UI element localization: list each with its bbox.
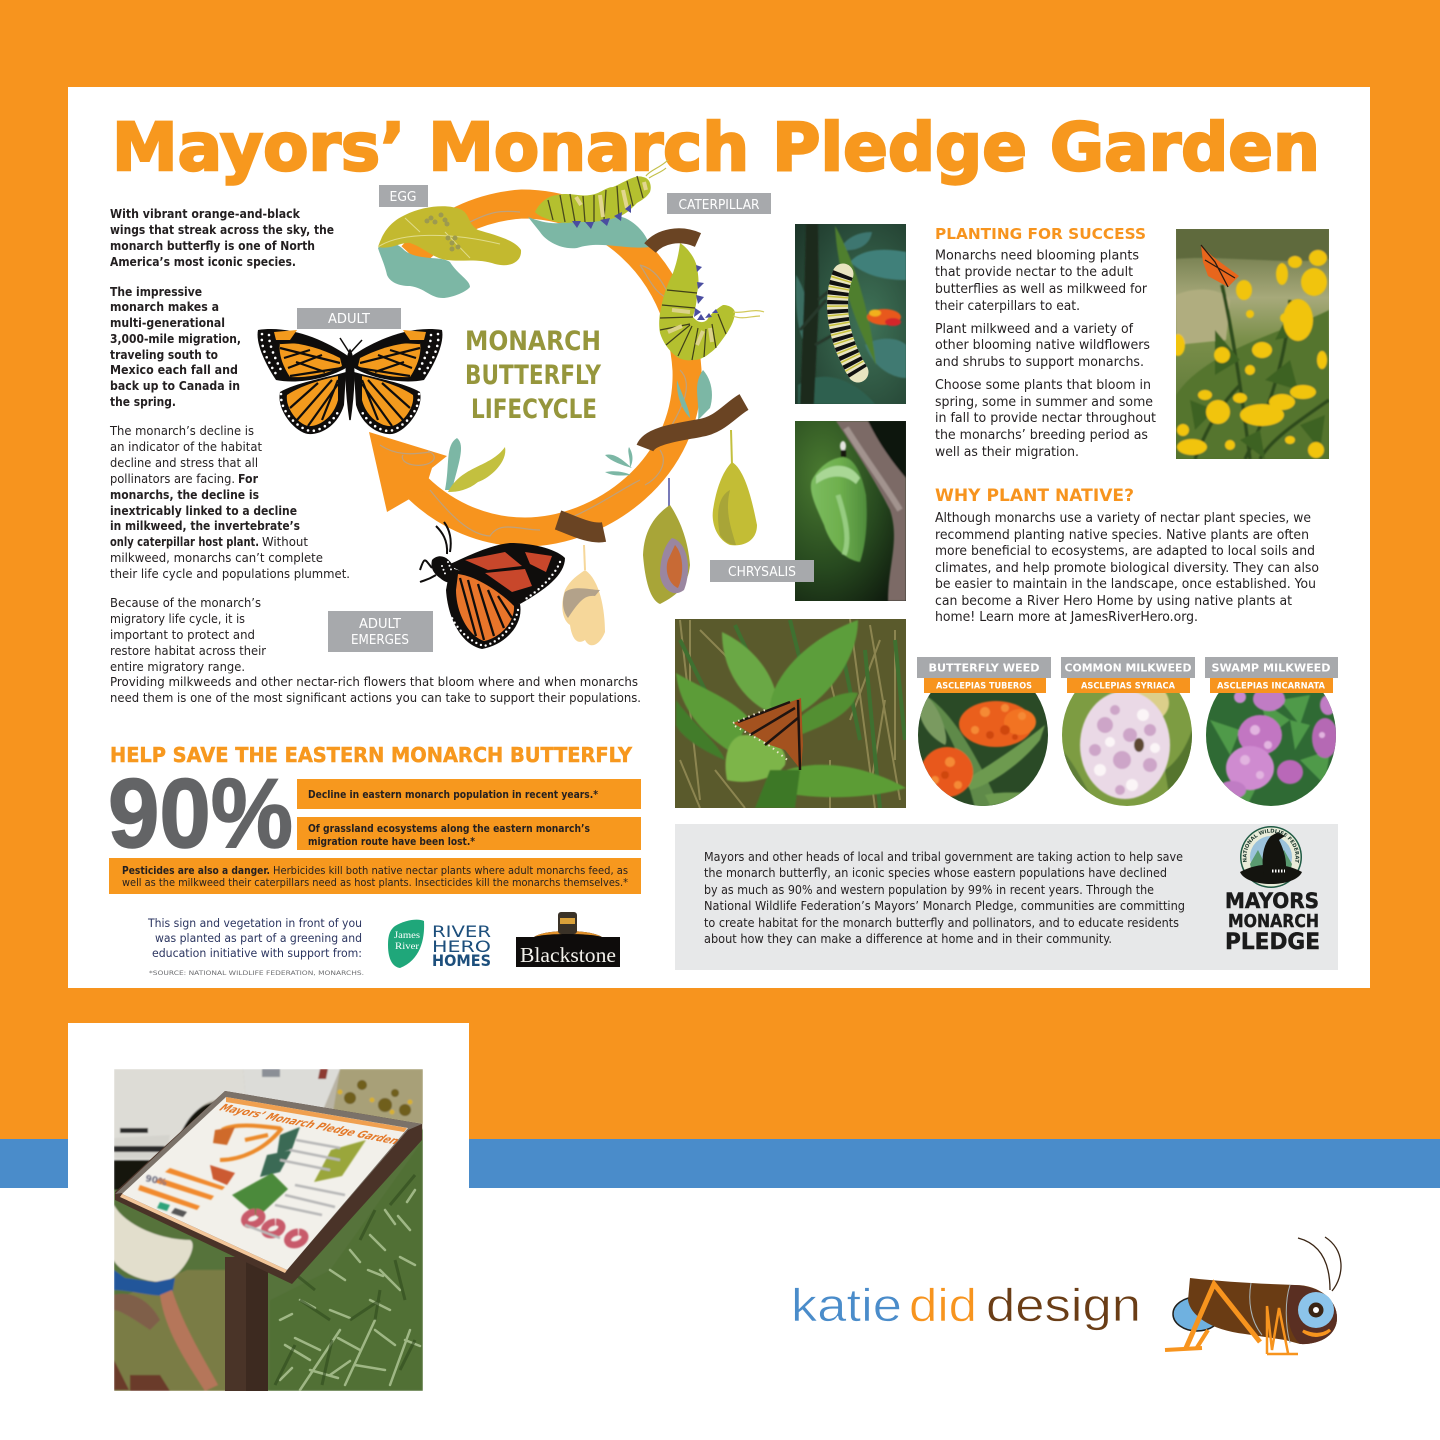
pledge body text: by as much as 90% and western population by 99% in recent years. Through the	[704, 883, 1154, 897]
plant card: common milkweed	[1060, 657, 1196, 810]
branch middle	[645, 402, 744, 448]
brand wordmark: katiedid design: did	[909, 1279, 977, 1331]
sign post	[246, 1262, 268, 1391]
bold migration paragraph: The impressive	[110, 285, 202, 299]
plant card: swamp milkweed	[1204, 657, 1340, 810]
support statement: education initiative with support from:	[152, 947, 362, 960]
bold intro paragraph: America’s most iconic species.	[110, 255, 296, 269]
stat bar: population decline: Decline in eastern monarch population in recent years.*	[308, 790, 599, 801]
bold migration paragraph	[110, 285, 241, 409]
section: planting for success: butterflies as well as milkweed for	[935, 282, 1148, 297]
logo: blackstone: Blackstone	[520, 943, 616, 967]
label: caterpillar	[667, 193, 771, 214]
pledge body text: about how they can make a difference at home and in their community.	[704, 932, 1112, 946]
section: planting for success: well as their migration.	[935, 445, 1079, 460]
branch top	[650, 236, 698, 248]
habitat paragraph: entire migratory range.	[110, 660, 245, 674]
decline paragraph: only caterpillar host plant.	[110, 535, 259, 549]
section: planting for success: PLANTING FOR SUCCESS	[935, 225, 1146, 243]
photo: green chrysalis	[795, 421, 906, 601]
bold migration paragraph: monarch makes a	[110, 300, 219, 314]
center heading: BUTTERFLY	[465, 360, 601, 391]
photo: yellow flowers	[1171, 229, 1329, 459]
plant card: common milkweed: ASCLEPIAS SYRIACA	[1081, 682, 1175, 692]
habitat paragraph: migratory life cycle, it is	[110, 612, 245, 626]
sign face	[120, 1097, 408, 1273]
section: planting for success: Plant milkweed and a variety of	[935, 322, 1133, 337]
brand wordmark: katiedid design	[791, 1279, 1141, 1331]
logo: river hero homes: RIVER	[432, 922, 491, 941]
support statement	[147, 917, 362, 960]
habitat paragraph: Because of the monarch’s	[110, 596, 261, 610]
intro text column	[109, 207, 641, 705]
photo: monarch on milkweed	[675, 619, 906, 808]
logo: river hero homes: HERO	[432, 937, 491, 956]
logo: mayors monarch pledge wordmark: PLEDGE	[1225, 930, 1320, 955]
stat bar: grassland lost	[297, 817, 641, 850]
decline paragraph	[109, 424, 350, 581]
section: planting for success: spring, some in summer and some	[935, 395, 1153, 410]
teal leaf on ring	[677, 370, 712, 420]
section: why plant native: home! Learn more at JamesRiverHero.org.	[935, 610, 1198, 625]
hanging caterpillar	[659, 243, 764, 360]
label: adult emerges: EMERGES	[351, 633, 409, 648]
section: why plant native: be easier to maintain in the landscape, once established. You	[935, 577, 1316, 592]
support statement: This sign and vegetation in front of you	[147, 917, 362, 930]
support statement: was planted as part of a greening and	[155, 932, 362, 945]
egg leaf with teal underside	[378, 206, 521, 298]
blue band	[0, 1139, 1440, 1188]
decline paragraph: For	[238, 472, 259, 486]
decline paragraph: The monarch’s decline is	[109, 424, 254, 438]
plant card: butterfly weed: BUTTERFLY WEED	[928, 662, 1040, 674]
stat bar: pesticides: Pesticides are also a danger.	[122, 866, 270, 877]
section: why plant native: recommend planting native species. Native plants are often	[935, 528, 1309, 543]
center heading	[465, 326, 601, 425]
section: planting for success	[935, 225, 1156, 460]
decline paragraph: Without	[262, 535, 308, 549]
logo: river hero homes: River	[395, 942, 420, 952]
section: planting for success: Monarchs need blooming plants	[935, 248, 1139, 264]
bold intro paragraph	[110, 207, 334, 269]
panel: mayors monarch pledge	[675, 824, 1338, 970]
brand wordmark: katiedid design: design	[986, 1279, 1141, 1331]
logo: national wildlife federation	[1240, 826, 1302, 888]
logo: national wildlife federation: NATIONAL WILDLIFE FEDERATION	[1242, 828, 1300, 864]
decline paragraph: decline and stress that all	[110, 456, 258, 470]
section: why plant native: WHY PLANT NATIVE?	[935, 486, 1134, 506]
label: adult	[297, 308, 401, 329]
decline paragraph: an indicator of the habitat	[110, 440, 262, 454]
caterpillar on leaf	[528, 160, 668, 248]
logo: mayors monarch pledge wordmark: MAYORS	[1225, 889, 1319, 914]
label: adult emerges	[328, 611, 433, 652]
plant card: swamp milkweed: ASCLEPIAS INCARNATA	[1217, 682, 1325, 692]
pledge body text	[704, 850, 1185, 946]
sign face: 90%	[144, 1174, 168, 1188]
decline paragraph: inextricably linked to a decline	[110, 504, 297, 518]
stat bar: grassland lost: migration route have been lost.*	[308, 837, 476, 848]
section: why plant native: climates, and help promote biological diversity. They can also	[935, 561, 1319, 576]
logo: river hero homes	[388, 920, 491, 970]
habitat paragraph: important to protect and	[110, 628, 255, 642]
white photo panel	[68, 1023, 469, 1440]
darkening chrysalis	[643, 478, 690, 604]
habitat paragraph	[110, 596, 641, 705]
icon: katydid mascot	[1165, 1237, 1341, 1354]
plant card: swamp milkweed: SWAMP MILKWEED	[1212, 662, 1330, 674]
section: planting for success: their caterpillars to eat.	[935, 299, 1080, 314]
pale empty chrysalis	[562, 545, 605, 645]
decline paragraph: in milkweed, the invertebrate’s	[110, 519, 300, 533]
bold migration paragraph: Mexico each fall and	[110, 363, 238, 377]
label: chrysalis: CHRYSALIS	[728, 565, 796, 580]
section: planting for success: the monarchs’ breeding period as	[935, 428, 1148, 443]
photo: caterpillar on milkweed	[795, 224, 906, 404]
plant card: butterfly weed: ASCLEPIAS TUBEROS	[936, 682, 1032, 692]
bold migration paragraph: the spring.	[110, 395, 176, 409]
small leaves inside ring	[445, 438, 632, 492]
pledge body text: to create habitat for the monarch butterfly and pollinators, and to educate residents	[704, 916, 1179, 930]
milkweed foliage strokes	[280, 1190, 420, 1390]
photo: installed sign	[114, 1069, 423, 1391]
bold migration paragraph: 3,000-mile migration,	[110, 332, 241, 346]
bold migration paragraph: traveling south to	[110, 348, 218, 362]
habitat paragraph: Providing milkweeds and other nectar-rich flowers that bloom where and when monarchs	[110, 675, 638, 689]
stat bar: pesticides: well as the milkweed their caterpillars need as host plants. Insecticides kill the monarchs themselves.*	[122, 878, 628, 889]
bold migration paragraph: back up to Canada in	[110, 379, 240, 393]
label: caterpillar: CATERPILLAR	[678, 198, 760, 213]
decline paragraph: pollinators are facing.	[110, 472, 235, 486]
center heading: MONARCH	[465, 326, 601, 357]
label: chrysalis	[710, 560, 814, 582]
section: planting for success: and shrubs to support monarchs.	[935, 355, 1144, 370]
section: why plant native	[935, 486, 1319, 625]
plant card: common milkweed: COMMON MILKWEED	[1064, 662, 1192, 674]
label: egg	[379, 185, 428, 207]
logo: mayors monarch pledge wordmark: MONARCH	[1228, 911, 1319, 932]
pledge body text: National Wildlife Federation’s Mayors’ Monarch Pledge, communities are committing	[704, 899, 1185, 913]
plant card: butterfly weed	[915, 657, 1051, 810]
photo background: grass and car	[114, 1069, 423, 1391]
pledge body text: the monarch butterfly, an iconic species whose eastern populations have declined	[704, 866, 1167, 880]
brand wordmark: katiedid design: katie	[791, 1279, 902, 1331]
pledge body text: Mayors and other heads of local and tribal government are taking action to help save	[704, 850, 1183, 864]
emerging butterfly	[420, 522, 565, 649]
section: planting for success: in fall to provide nectar throughout	[935, 411, 1156, 426]
section: planting for success: that provide nectar to the adult	[935, 265, 1133, 280]
big stat: 90%: 90%	[108, 758, 293, 868]
logo: mayors monarch pledge wordmark	[1225, 889, 1320, 955]
label: adult: ADULT	[328, 312, 370, 327]
logo: river hero homes: HOMES	[432, 951, 491, 970]
source note: *SOURCE: NATIONAL WILDLIFE FEDERATION, MONARCHS.	[149, 969, 364, 977]
bottom branch	[558, 520, 604, 533]
orange background band	[0, 0, 1440, 1139]
bold migration paragraph: multi-generational	[110, 316, 225, 330]
stat bar: population decline	[297, 779, 641, 809]
decline paragraph: monarchs, the decline is	[110, 488, 259, 502]
logo: blackstone	[516, 912, 620, 967]
label: adult emerges: ADULT	[359, 617, 401, 632]
logo: river hero homes: James	[394, 931, 420, 941]
bold intro paragraph: With vibrant orange-and-black	[110, 207, 301, 221]
lifecycle diagram	[258, 160, 814, 652]
stat bar: pesticides	[109, 858, 641, 894]
decline paragraph: milkweed, monarchs can’t complete	[110, 551, 323, 565]
lifecycle ring arrow	[369, 204, 687, 536]
center heading: LIFECYCLE	[471, 394, 597, 425]
stat bar: grassland lost: Of grassland ecosystems along the eastern monarch’s	[308, 824, 590, 835]
bold intro paragraph: wings that streak across the sky, the	[110, 223, 334, 237]
heading: help save the eastern monarch butterfly: HELP SAVE THE EASTERN MONARCH BUTTERFLY	[110, 743, 633, 767]
bold intro paragraph: monarch butterfly is one of North	[110, 239, 315, 253]
green chrysalis	[713, 430, 757, 545]
title: Mayors’ Monarch Pledge Garden	[112, 109, 1320, 186]
section: why plant native: Although monarchs use a variety of nectar plant species, we	[935, 511, 1311, 526]
section: planting for success: Choose some plants that bloom in	[935, 378, 1151, 393]
section: why plant native: can become a River Hero Home by using native plants at	[935, 594, 1292, 609]
habitat paragraph: restore habitat across their	[110, 644, 267, 658]
sign frame	[115, 1091, 422, 1284]
label: egg: EGG	[390, 190, 416, 205]
habitat paragraph: need them is one of the most significant actions you can take to support their populations.	[110, 691, 641, 705]
section: planting for success: other blooming native wildflowers	[935, 338, 1150, 353]
stat bar: pesticides: Herbicides kill both native nectar plants where adult monarchs feed, as	[273, 866, 628, 877]
section: why plant native: more beneficial to ecosystems, are adapted to local soils and	[935, 544, 1315, 559]
decline paragraph: their life cycle and populations plummet.	[110, 567, 350, 581]
white sign panel	[68, 87, 1370, 988]
adult butterfly	[258, 329, 442, 434]
sign face: Mayors’ Monarch Pledge Garden	[216, 1102, 403, 1147]
